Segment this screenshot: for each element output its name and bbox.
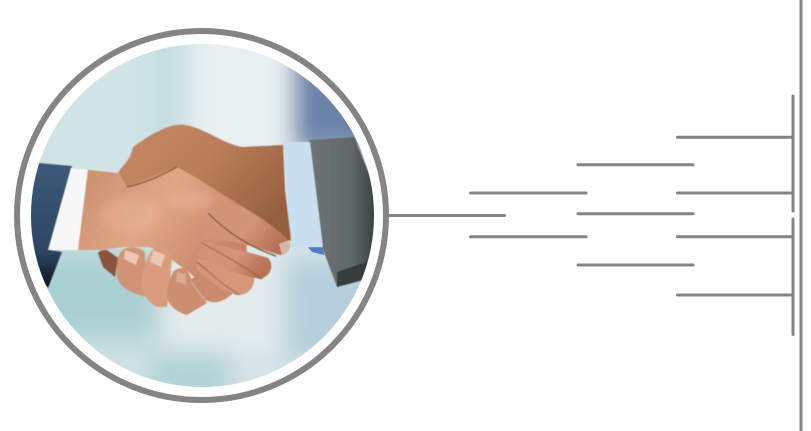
knuckle highlight [102,192,210,230]
upper vertical bracket [792,96,794,211]
right gray sleeve [309,137,380,287]
second level lines [470,193,586,237]
third level lines [578,165,693,265]
front hand palm [78,167,250,285]
blue shirt peek [308,247,324,255]
fingers of the front hand [190,206,290,302]
connector lines [389,96,793,334]
lower vertical bracket [792,219,794,334]
right light blue cuff [283,142,323,247]
photo background [31,44,374,387]
fingernail [279,240,290,255]
main stem line [389,214,504,217]
left navy sleeve [28,162,72,288]
icon: handshake photo in circle [31,44,374,387]
fourth level lines [678,137,793,295]
thumb crease [127,167,177,187]
far right vertical line [800,0,802,431]
upper hand [118,125,291,250]
curled fingers [98,247,207,315]
left white cuff [48,168,88,250]
photo ring [17,31,386,400]
